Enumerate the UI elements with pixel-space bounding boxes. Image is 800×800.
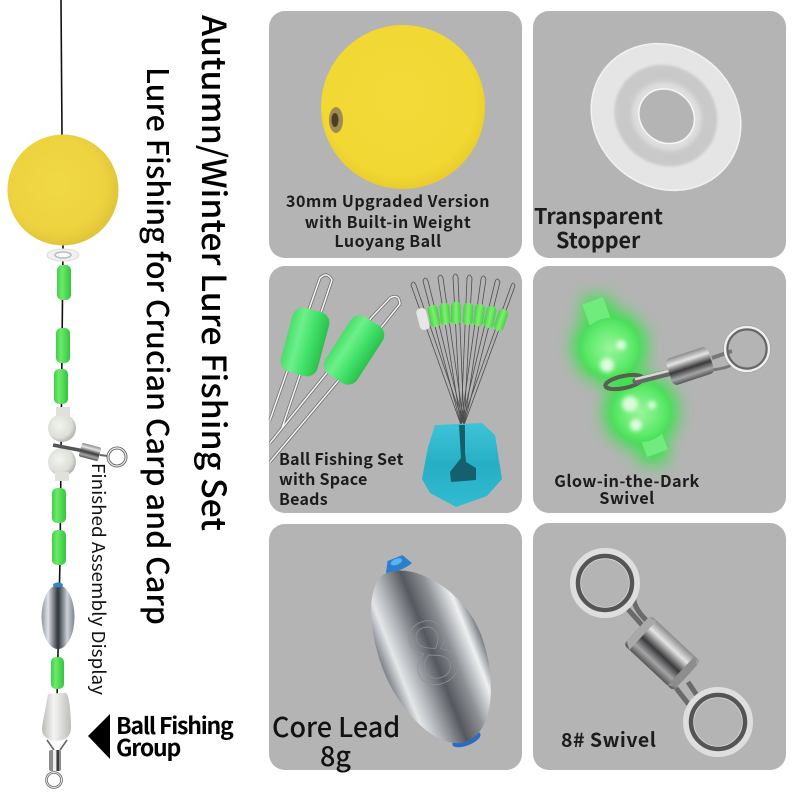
icon: transparent stopper ring [561,13,771,221]
label: ball fishing set: Ball Fishing Set [279,446,404,470]
panel: 8# swivel [533,523,786,770]
label: 8# swivel: 8# Swivel [561,724,656,753]
icon: pearl beads with swivel [48,407,126,481]
icon: green beads upper [54,265,71,404]
icon: swivel [604,327,769,392]
label: ball fishing group: Group [116,729,180,763]
icon: yellow foam ball [321,25,485,189]
arrow: pointer to ball fishing group [88,714,110,759]
label: transparent stopper: Stopper [556,224,641,255]
assembled rig [8,0,126,788]
icon: core lead sinker: 8 [384,579,476,715]
icon: two large space beads [270,275,400,462]
label: ball fishing set: with Space [279,466,368,490]
icon: rig lead [42,582,74,649]
icon: float stopper fan on holder [411,274,515,507]
icon: 8# barrel swivel [576,554,748,752]
label: 30mm ball: Luoyang Ball [334,228,442,252]
panel: core lead [269,524,522,774]
subtitle: crucian carp: Lure Fishing for Crucian Carp and Carp [138,67,182,625]
icon: glowing beads [572,296,679,464]
icon: rig sinker and swivel [42,693,71,788]
fishing line [57,0,63,700]
panel: yellow ball [269,11,522,258]
icon: rig yellow ball [8,134,118,246]
panel: transparent stopper [533,11,786,258]
panel: glow swivel [533,266,786,513]
label: glow swivel: Glow-in-the-Dark [554,468,700,492]
icon: green beads lower [51,488,66,689]
label: 30mm ball: 30mm Upgraded Version [286,188,490,212]
caption: finished assembly: Finished Assembly Display [86,463,112,696]
label: transparent stopper: Transparent [534,200,663,231]
label: 30mm ball: with Built-in Weight [305,209,471,233]
icon: core lead sinker [347,539,517,764]
label: core lead: 8g [320,735,351,774]
label: ball fishing group: Ball Fishing [116,707,234,741]
label: glow swivel: Swivel [599,485,655,509]
icon: rig stopper [47,249,79,261]
title: autumn winter: Autumn/Winter Lure Fishing Set [192,15,240,531]
label: ball fishing set: Beads [279,486,328,510]
label: core lead: Core Lead [272,706,400,745]
panel: ball fishing set [269,266,522,513]
